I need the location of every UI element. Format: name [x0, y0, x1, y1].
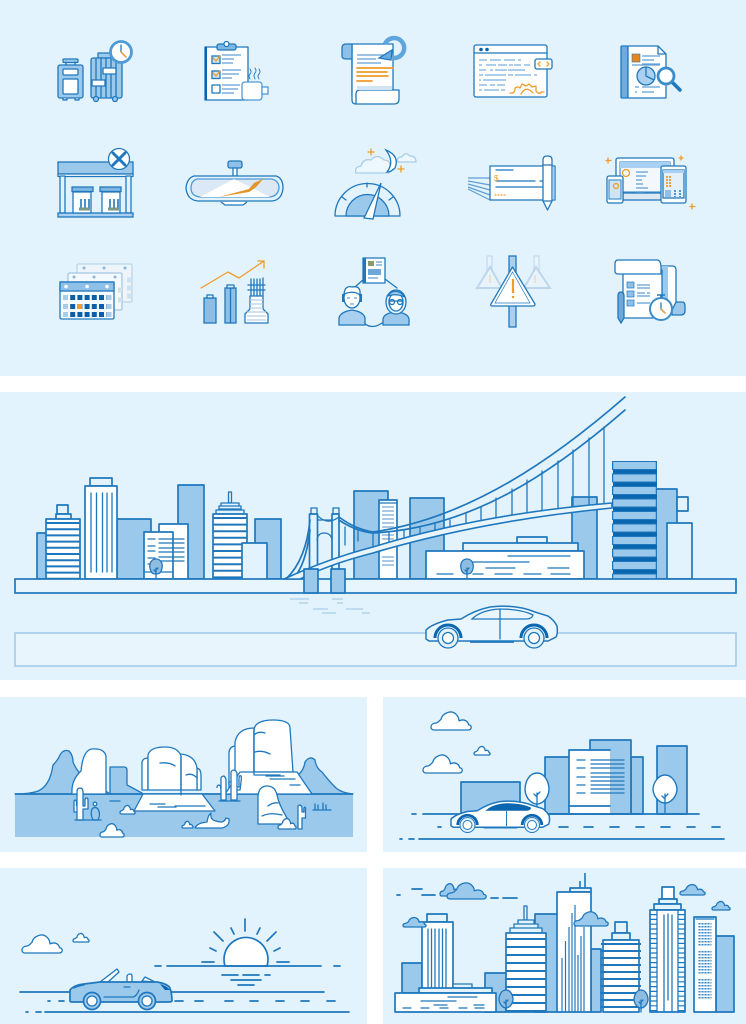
tower with low podium — [395, 914, 496, 1012]
striped tower centre left — [213, 492, 267, 580]
car: convertible — [70, 969, 172, 1010]
icon: speed gauge with night sky — [335, 149, 416, 219]
road lines — [400, 814, 724, 839]
suspension bridge — [284, 397, 625, 593]
icon: rear-view mirror with lightning — [186, 161, 283, 205]
long low building — [426, 537, 584, 579]
left rock — [72, 749, 106, 794]
road outline — [15, 633, 736, 666]
office building with tree — [144, 524, 188, 579]
centre butte — [134, 747, 215, 811]
water ripples — [290, 599, 370, 613]
icon: bank cheque and pen — [468, 156, 555, 210]
icon: calendars — [60, 264, 132, 319]
right cacti — [217, 770, 241, 801]
sky clouds and dashes — [397, 883, 730, 910]
right cactus — [298, 805, 306, 829]
panel: desert landscape — [0, 697, 367, 852]
distant mesas — [15, 750, 353, 794]
blue cloud over podium — [403, 918, 426, 927]
tall white tower — [85, 478, 117, 579]
icon: bank cheque and pen: $ — [494, 174, 499, 183]
panel: dense city skyline — [383, 868, 746, 1024]
tiny cacti — [313, 803, 331, 810]
foreground rock — [258, 786, 287, 824]
slim office tower — [694, 917, 716, 1012]
icon: responsive devices — [606, 156, 695, 209]
striped tower — [499, 906, 546, 1012]
terraced tower — [603, 922, 648, 1012]
striped tower left — [46, 505, 80, 579]
back blue buildings — [402, 914, 734, 1012]
desert ground — [15, 794, 353, 837]
icon: browser code window — [474, 45, 552, 97]
clouds — [423, 712, 490, 773]
animal skull — [195, 813, 229, 828]
ground strip — [15, 579, 736, 593]
tall windowed tower — [650, 887, 685, 1012]
trees — [525, 773, 677, 814]
clouds — [22, 933, 89, 953]
sun — [210, 919, 280, 966]
blue buildings — [461, 740, 687, 814]
bushes — [100, 805, 296, 837]
striped blue tower right — [613, 461, 692, 579]
icon: gas station — [58, 148, 133, 217]
icon: rising chart buildings — [201, 261, 268, 323]
icon: schedule document with stopwatch — [615, 260, 685, 323]
office block — [569, 750, 624, 814]
back buildings — [37, 485, 688, 579]
right butte — [225, 720, 312, 794]
icon: report with magnifier — [621, 46, 680, 98]
car: sedan — [426, 606, 557, 648]
small striped tower behind deck — [379, 500, 397, 579]
icon: team with shared document — [339, 258, 409, 326]
icon: luggage with clock — [58, 42, 132, 102]
car: white sedan — [451, 801, 550, 832]
icon: scroll with refresh arrow — [342, 38, 404, 104]
road lines — [20, 992, 349, 1012]
panel: icon grid — [0, 0, 746, 376]
icon: clipboard and coffee — [205, 42, 268, 100]
panel: city with car — [383, 697, 746, 852]
panel: sunset drive — [0, 868, 367, 1024]
icon: warning signs — [477, 256, 550, 327]
horizon and water — [155, 962, 340, 985]
tallest white tower — [557, 873, 608, 1012]
panel: city skyline with bridge — [0, 392, 746, 680]
left cactus — [74, 788, 120, 820]
